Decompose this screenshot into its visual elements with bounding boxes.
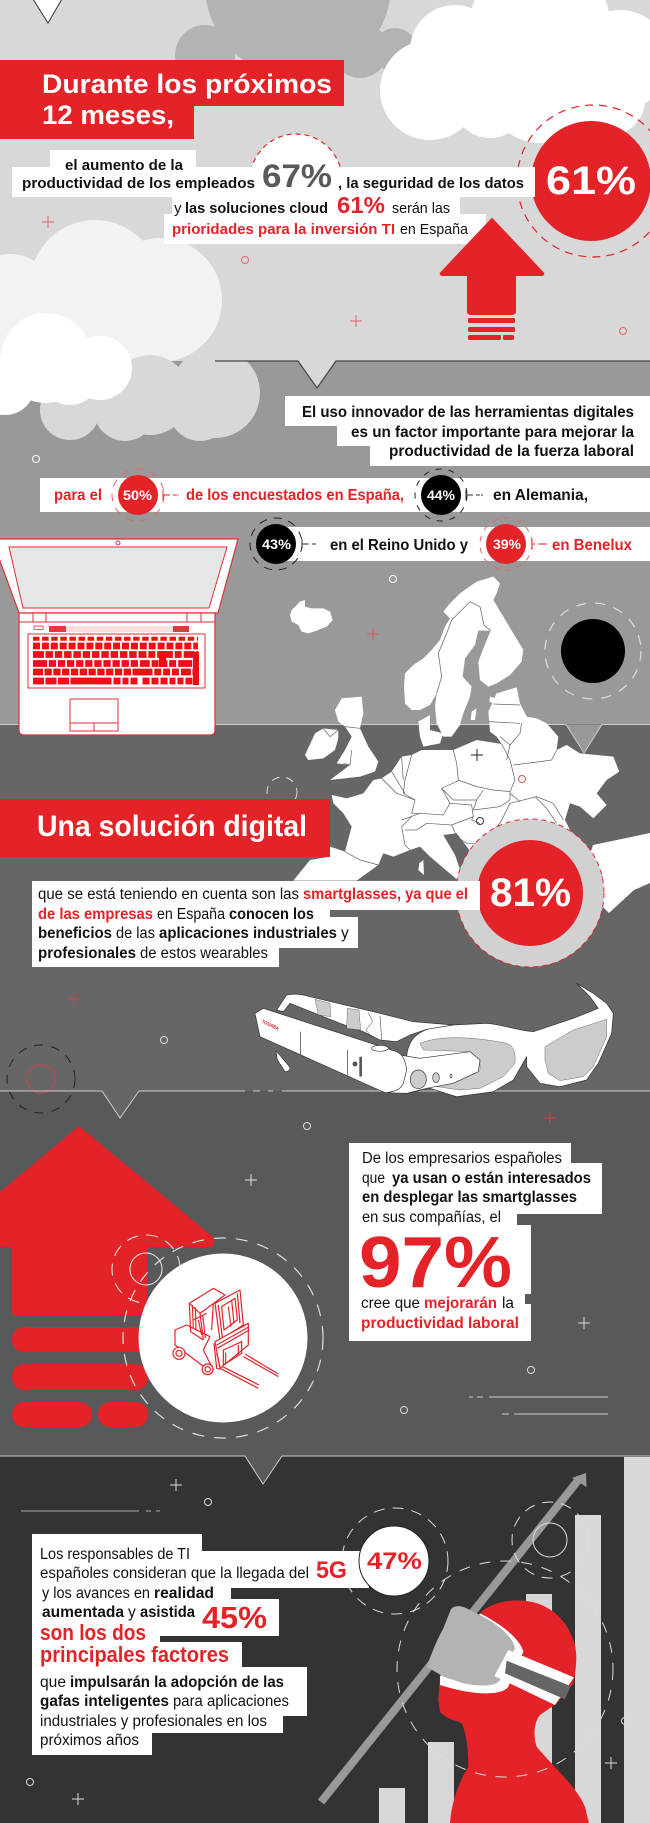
decorative markers section 1 (42, 216, 626, 334)
stats row: Spain and Germany (40, 469, 650, 521)
callout: 67 percent dashed circle (250, 134, 342, 226)
section notch 1 (215, 361, 650, 388)
left lens (420, 1038, 515, 1090)
text block: investment priorities: el aumento de la (65, 157, 184, 174)
title block (0, 60, 344, 139)
text block: IT leaders: para aplicaciones (173, 1693, 289, 1710)
icon: red up arrow (441, 219, 543, 340)
text block: IT leaders: 45% (202, 1600, 267, 1635)
keyboard frame (28, 634, 205, 688)
icon: black dashed circle (545, 603, 641, 699)
text block: innovative digital tools (285, 396, 650, 466)
temple arm (277, 994, 453, 1042)
laptop base (19, 613, 215, 735)
stat: 47 percent (359, 1526, 429, 1596)
callout: 61 percent red circle: 61% (546, 159, 636, 203)
text block: investment priorities: , la seguridad de los datos (338, 175, 524, 192)
stats row: Spain and Germany: de los encuestados en España, (186, 487, 404, 504)
stat: 97 percent: 97% (359, 1223, 512, 1303)
text block: 97 percent (349, 1143, 602, 1341)
icon: Turkey (589, 833, 650, 913)
Denmark (418, 715, 443, 747)
text block: IT leaders: impulsarán la adopción de las (70, 1674, 284, 1691)
stat: 43 percent (250, 518, 302, 570)
text block: smartglasses benefits: smartglasses, ya que el (303, 886, 468, 903)
Mediterranean sea (357, 847, 458, 881)
device body (255, 1008, 407, 1093)
text block: investment priorities: serán las (392, 200, 450, 217)
text block: IT leaders: españoles consideran que la llegada del (40, 1565, 309, 1582)
Scandinavia (404, 577, 523, 737)
text block: smartglasses benefits: de las (116, 925, 155, 942)
text block: investment priorities: las soluciones cloud (185, 200, 328, 217)
headset visor (427, 1606, 515, 1686)
text block: smartglasses benefits: aplicaciones industriales (159, 925, 337, 942)
text block: IT leaders (32, 1526, 429, 1755)
stat: 50 percent: 50% (123, 487, 153, 503)
text block: IT leaders: son los dos (40, 1620, 146, 1645)
text block: IT leaders: asistida (140, 1604, 195, 1621)
section notch 3 (0, 1091, 650, 1118)
callout: 61 percent red circle (517, 105, 650, 257)
panel: smartglasses statistic section background (0, 1091, 650, 1457)
text block: IT leaders: próximos años (40, 1732, 139, 1749)
text block: investment priorities: en España (400, 221, 469, 238)
text block: 97 percent: productividad laboral (361, 1315, 519, 1332)
panel: digital solution section background (0, 724, 650, 1092)
text block: 97 percent: en desplegar las smartglasses (362, 1189, 577, 1206)
stat: 44 percent: 44% (427, 487, 456, 503)
brand text: TOSHIBA (260, 1019, 280, 1032)
text block: 97 percent: la (502, 1295, 514, 1312)
far ear hook (276, 1051, 290, 1072)
stat: 47 percent: 47% (367, 1548, 422, 1575)
panel: 5G section background (0, 1456, 650, 1823)
Iceland (290, 600, 333, 633)
icon: person with VR headset (427, 1600, 589, 1823)
text block: IT leaders: principales factores (40, 1642, 229, 1667)
text block: investment priorities: prioridades para la inversión TI (172, 221, 395, 238)
icon: grey cloud (175, 0, 417, 85)
text block: smartglasses benefits: profesionales (38, 945, 136, 962)
frame (407, 983, 613, 1097)
text block: innovative digital tools: El uso innovador de las herramientas digitales (302, 404, 634, 421)
right lens (545, 1019, 607, 1081)
callout: 81 percent circle (456, 819, 604, 967)
text block: investment priorities: 67% (262, 158, 332, 194)
icon: grey cloud lower left (40, 348, 260, 441)
text block: 97 percent: ya usan o están interesados (392, 1170, 591, 1187)
text block: 97 percent: en sus compañías, el (362, 1209, 501, 1226)
icon: top notch (33, 0, 62, 23)
text block: IT leaders: y los avances en (42, 1585, 150, 1602)
stats row: Spain and Germany: en Alemania, (493, 487, 588, 504)
text block: smartglasses benefits: que se está teniendo en cuenta son las (38, 886, 299, 903)
text block: IT leaders: que (40, 1674, 66, 1691)
icon: forklift circle (112, 1235, 323, 1438)
decorative rings section 5 (21, 1479, 628, 1805)
decorative markers section 4 (245, 1112, 608, 1414)
title text line 1: Durante los próximos (42, 69, 332, 99)
head silhouette (438, 1600, 589, 1823)
stats row: UK and Benelux: en el Reino Unido y (330, 537, 468, 554)
stat: 81 percent text: 81% (490, 871, 571, 915)
stat: 50 percent (112, 469, 164, 521)
map of Europe (290, 577, 619, 881)
headset rim (440, 1613, 523, 1693)
text block: smartglasses benefits: en España (157, 906, 225, 923)
heading: Una solución digital: Una solución digital (37, 810, 307, 843)
stats row: Spain and Germany: para el (54, 487, 102, 504)
text block: 97 percent: cree que (361, 1295, 420, 1312)
decorative markers section 2 (32, 456, 526, 824)
text block: investment priorities (12, 150, 535, 244)
laptop screen (9, 547, 227, 608)
text block: innovative digital tools: es un factor importante para mejorar la (351, 424, 634, 441)
title background (0, 60, 344, 139)
stat: 39 percent: 39% (493, 536, 522, 552)
icon: large red arrow (0, 1126, 214, 1427)
text block: IT leaders: 5G (316, 1557, 347, 1584)
right light band (624, 1457, 650, 1823)
United Kingdom (330, 697, 378, 780)
camera front (387, 1052, 480, 1093)
text block: investment priorities: y (174, 200, 182, 217)
panel: digital tools section background (0, 361, 650, 725)
decorative markers section 3 (7, 993, 168, 1113)
text block: IT leaders: Los responsables de TI (40, 1546, 190, 1563)
text block: investment priorities: 61% (337, 192, 385, 218)
stats row: UK and Benelux (250, 518, 650, 570)
Adriatic sea (443, 833, 472, 869)
stat: 39 percent (480, 518, 532, 570)
text block: innovative digital tools: productividad de la fuerza laboral (389, 443, 634, 460)
trackpad (70, 699, 118, 731)
headset strap (494, 1650, 574, 1705)
text block: 97 percent: mejorarán (424, 1295, 497, 1312)
text block: smartglasses benefits: de estos wearables (140, 945, 268, 962)
keyboard keys (33, 639, 198, 681)
title text line 2: 12 meses, (42, 100, 174, 130)
arrow: rising trend (321, 1473, 586, 1802)
section notch 2 (0, 724, 650, 753)
text block: investment priorities: productividad de los empleados (22, 175, 255, 192)
national borders (323, 602, 563, 865)
Ireland (305, 728, 338, 760)
text block: 97 percent: De los empresarios españoles (362, 1150, 562, 1167)
icon: white cloud lower left (0, 313, 132, 415)
text block: IT leaders: aumentada (42, 1604, 124, 1621)
heading: Una solución digital (0, 799, 330, 857)
icon: white cloud (380, 0, 650, 143)
icon: smart glasses (255, 983, 613, 1097)
panel: cloud section background (0, 0, 650, 362)
text block: IT leaders: realidad (154, 1585, 214, 1602)
bar chart: growth bars (379, 1515, 601, 1823)
section notch 4 (0, 1456, 650, 1484)
icon: pale cloud left (0, 220, 222, 362)
stats row: UK and Benelux: en Benelux (552, 537, 632, 554)
stat: 43 percent: 43% (262, 536, 292, 552)
text block: smartglasses benefits (32, 881, 480, 967)
text block: IT leaders: industriales y profesionales en los (40, 1713, 267, 1730)
Corsica (418, 860, 424, 875)
text block: smartglasses benefits: conocen los (229, 906, 314, 923)
text block: IT leaders: y (128, 1604, 136, 1621)
text block: smartglasses benefits: de las empresas (38, 906, 153, 923)
text block: IT leaders: gafas inteligentes (40, 1693, 169, 1710)
laptop lid (0, 539, 238, 613)
Gotland and Saaremaa (471, 708, 477, 720)
text block: smartglasses benefits: beneficios (38, 925, 112, 942)
icon: forklift (173, 1288, 278, 1388)
text block: smartglasses benefits: y (341, 925, 349, 942)
continental Europe (293, 687, 619, 881)
text block: 97 percent: que (362, 1170, 385, 1187)
speaker dots (49, 626, 189, 632)
icon: laptop (0, 539, 238, 735)
stat: 44 percent (415, 469, 467, 521)
